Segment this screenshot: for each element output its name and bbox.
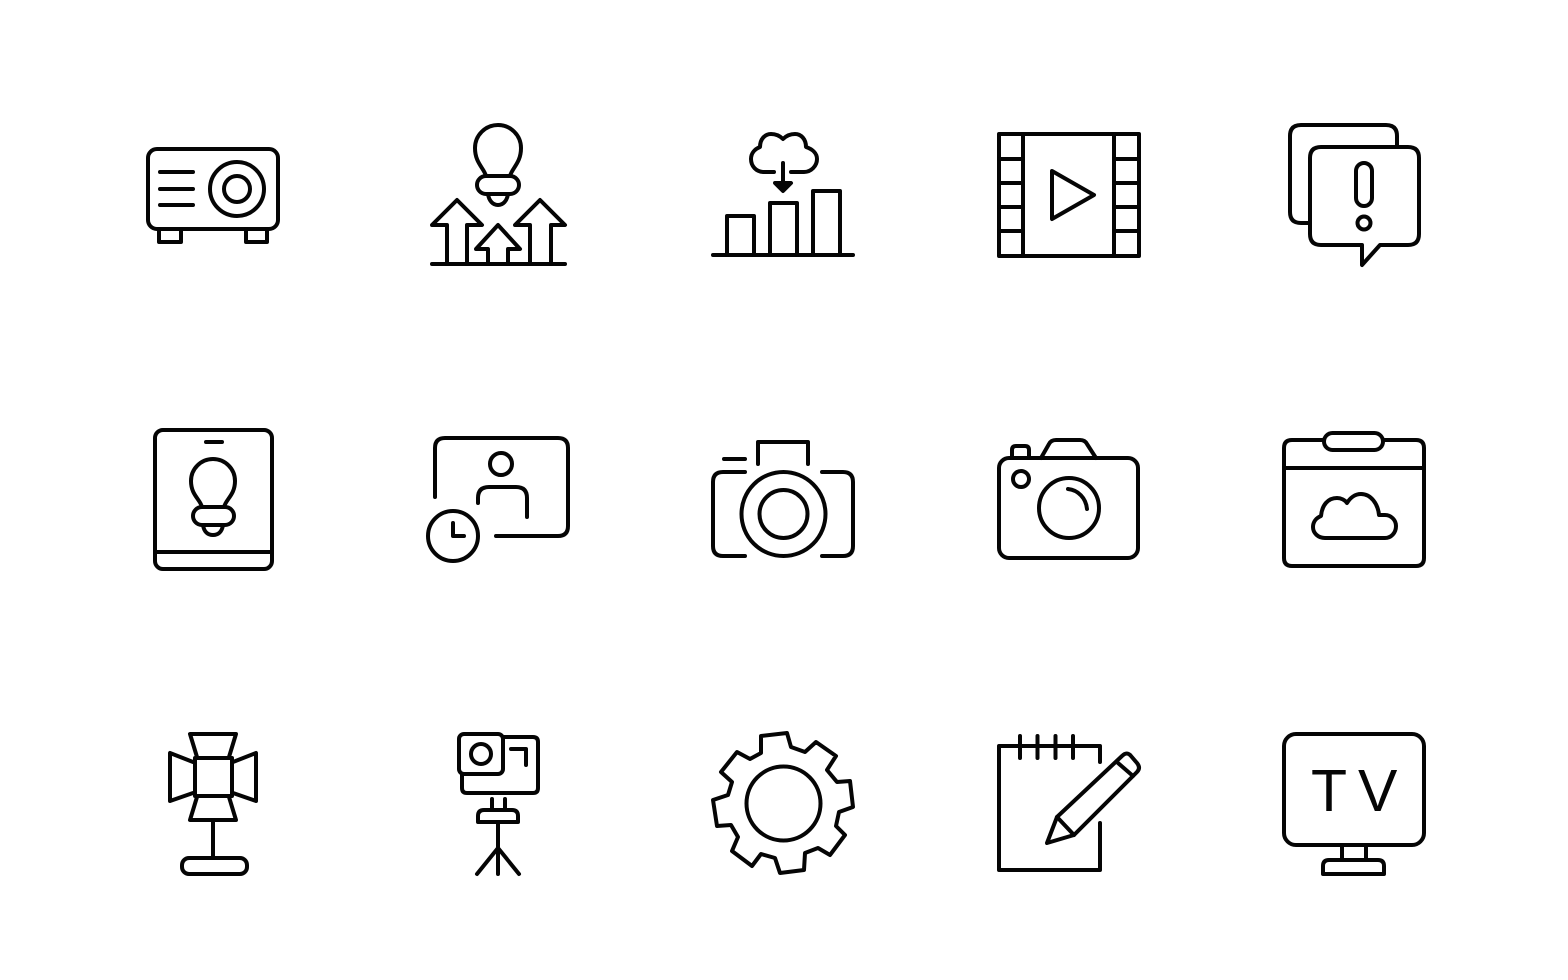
icon: studio light with barn doors bbox=[170, 734, 256, 874]
icon: profile card with clock bbox=[428, 438, 568, 561]
icon: tablet with light bulb bbox=[155, 430, 272, 569]
icon: cloud download bar chart bbox=[713, 134, 853, 255]
icon: camera with brackets bbox=[713, 442, 853, 556]
icon: projector bbox=[148, 149, 278, 242]
label: TV: TV bbox=[1311, 758, 1398, 824]
icon: clipboard with cloud bbox=[1284, 433, 1424, 566]
icon: gear bbox=[713, 733, 853, 873]
icon: television bbox=[1284, 734, 1424, 874]
icon: compact camera bbox=[999, 440, 1138, 558]
icon: film strip with play button bbox=[999, 134, 1139, 256]
icon: notepad with pencil bbox=[999, 736, 1139, 870]
icon: light bulb with growth arrows bbox=[432, 125, 565, 264]
icon: alert speech bubbles bbox=[1290, 125, 1419, 265]
icon: action camera on tripod bbox=[459, 734, 538, 874]
